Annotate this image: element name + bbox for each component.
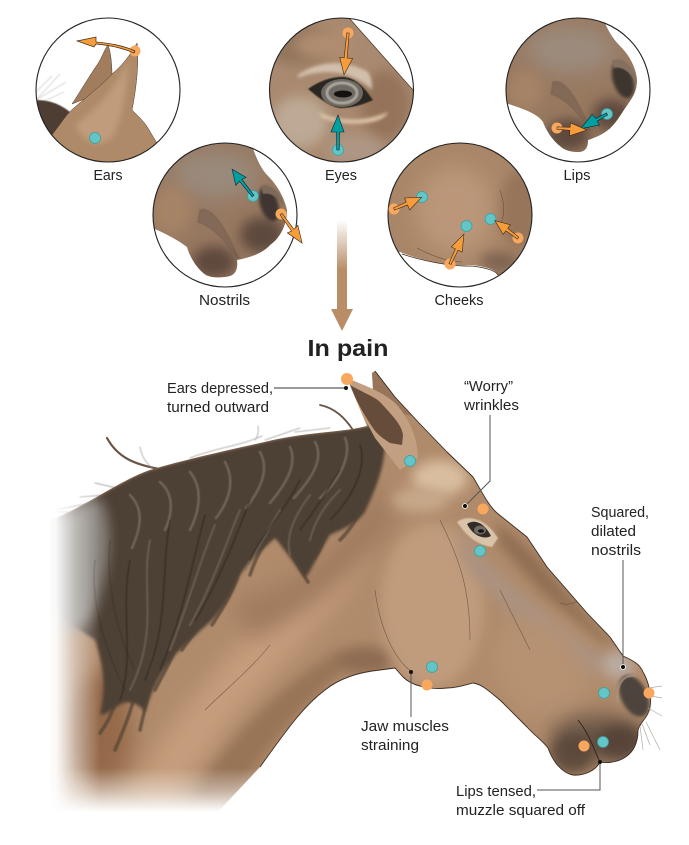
shading bbox=[136, 576, 354, 796]
callout: jaw muscles bbox=[361, 670, 449, 754]
neck and jaw lines bbox=[205, 520, 580, 710]
callout: ears depressed: Ears depressed, bbox=[167, 381, 273, 397]
marker: nostril pain point bbox=[276, 208, 286, 220]
callout: jaw muscles: Jaw muscles bbox=[361, 719, 449, 735]
right ear bbox=[372, 371, 412, 416]
marker: cheek middle relaxed point bbox=[461, 220, 472, 232]
marker: eye upper pain point bbox=[342, 28, 354, 38]
marker: lips pain point bbox=[552, 122, 562, 134]
mane strands bbox=[94, 438, 365, 750]
arrow: cheek upper bbox=[392, 192, 424, 215]
marker: lip pain point bbox=[578, 740, 590, 752]
lip crease bbox=[578, 720, 600, 762]
marker: brow pain point bbox=[478, 504, 488, 514]
arrow: nostril orange bbox=[276, 210, 308, 247]
label: eyes: Eyes bbox=[325, 168, 357, 184]
marker: nostril relaxed point bbox=[598, 688, 610, 698]
callout: ears depressed bbox=[167, 381, 348, 416]
grey fading mane at left bbox=[50, 497, 109, 633]
nostril bbox=[613, 671, 655, 721]
callout: nostrils: nostrils bbox=[591, 543, 641, 559]
callout: nostrils: Squared, bbox=[591, 505, 649, 521]
marker: ears pain point bbox=[130, 46, 140, 56]
label: cheeks: Cheeks bbox=[434, 293, 484, 309]
panel: cheeks bbox=[387, 142, 533, 288]
marker: cheek upper relaxed point bbox=[416, 192, 428, 202]
panel: eyes bbox=[268, 18, 414, 162]
whiskers bbox=[640, 686, 662, 750]
arrow: eye orange bbox=[338, 32, 355, 75]
fade left bbox=[45, 495, 100, 825]
callout: nostrils bbox=[591, 505, 649, 670]
callout: lips tensed bbox=[456, 760, 602, 819]
label: lips: Lips bbox=[564, 168, 590, 184]
arrow: lips orange bbox=[557, 122, 587, 137]
heading: in pain: In pain bbox=[308, 335, 388, 361]
arrow: ear turns outward bbox=[77, 37, 135, 53]
marker: cheek right relaxed point bbox=[485, 214, 496, 224]
marker: nostril pain point bbox=[644, 688, 654, 698]
arrow: lips teal bbox=[577, 108, 610, 134]
marker: lip relaxed point bbox=[598, 736, 608, 748]
callout: nostrils: dilated bbox=[591, 524, 636, 540]
marker: cheek upper pain point bbox=[388, 204, 400, 214]
marker: ears relaxed point bbox=[90, 132, 100, 144]
arrow: transition to in pain bbox=[331, 220, 353, 331]
illustration: horse head and neck bbox=[56, 370, 662, 810]
callout: worry wrinkles: wrinkles bbox=[463, 398, 519, 414]
head outline bbox=[260, 371, 651, 775]
marker: nostril relaxed point bbox=[248, 190, 258, 202]
eye bbox=[457, 518, 498, 547]
callout: worry wrinkles: “Worry” bbox=[464, 379, 513, 395]
panel: nostrils bbox=[150, 140, 308, 287]
marker: under-eye relaxed point bbox=[474, 546, 486, 556]
arrow: eye teal bbox=[331, 115, 344, 150]
callout: lips tensed: muzzle squared off bbox=[456, 803, 586, 819]
left ear bbox=[347, 378, 418, 470]
arrow: cheek middle bbox=[445, 232, 469, 267]
mane wisps above the neck bbox=[50, 405, 353, 512]
label: ears: Ears bbox=[94, 168, 122, 184]
callout: ears depressed: turned outward bbox=[167, 400, 269, 416]
marker: cheek right pain point bbox=[512, 232, 524, 244]
marker: jaw relaxed point bbox=[426, 662, 438, 672]
marker: jaw pain point bbox=[422, 680, 432, 690]
arrow: nostril teal bbox=[227, 166, 258, 200]
marker: lips relaxed point bbox=[602, 108, 612, 120]
panel: ears bbox=[30, 18, 180, 170]
marker: eye lower relaxed point bbox=[332, 144, 344, 156]
callout: worry wrinkles bbox=[462, 379, 519, 508]
mane bbox=[50, 425, 385, 715]
callout: jaw muscles: straining bbox=[361, 738, 419, 754]
marker: ear pain point bbox=[341, 373, 353, 385]
panel: lips bbox=[500, 10, 650, 162]
marker: cheek middle pain point bbox=[444, 258, 456, 270]
label: nostrils: Nostrils bbox=[199, 293, 250, 309]
arrow: cheek right bbox=[491, 216, 522, 243]
marker: poll relaxed point bbox=[404, 456, 416, 466]
callout: lips tensed: Lips tensed, bbox=[456, 784, 536, 800]
fade bottom bbox=[40, 768, 270, 820]
